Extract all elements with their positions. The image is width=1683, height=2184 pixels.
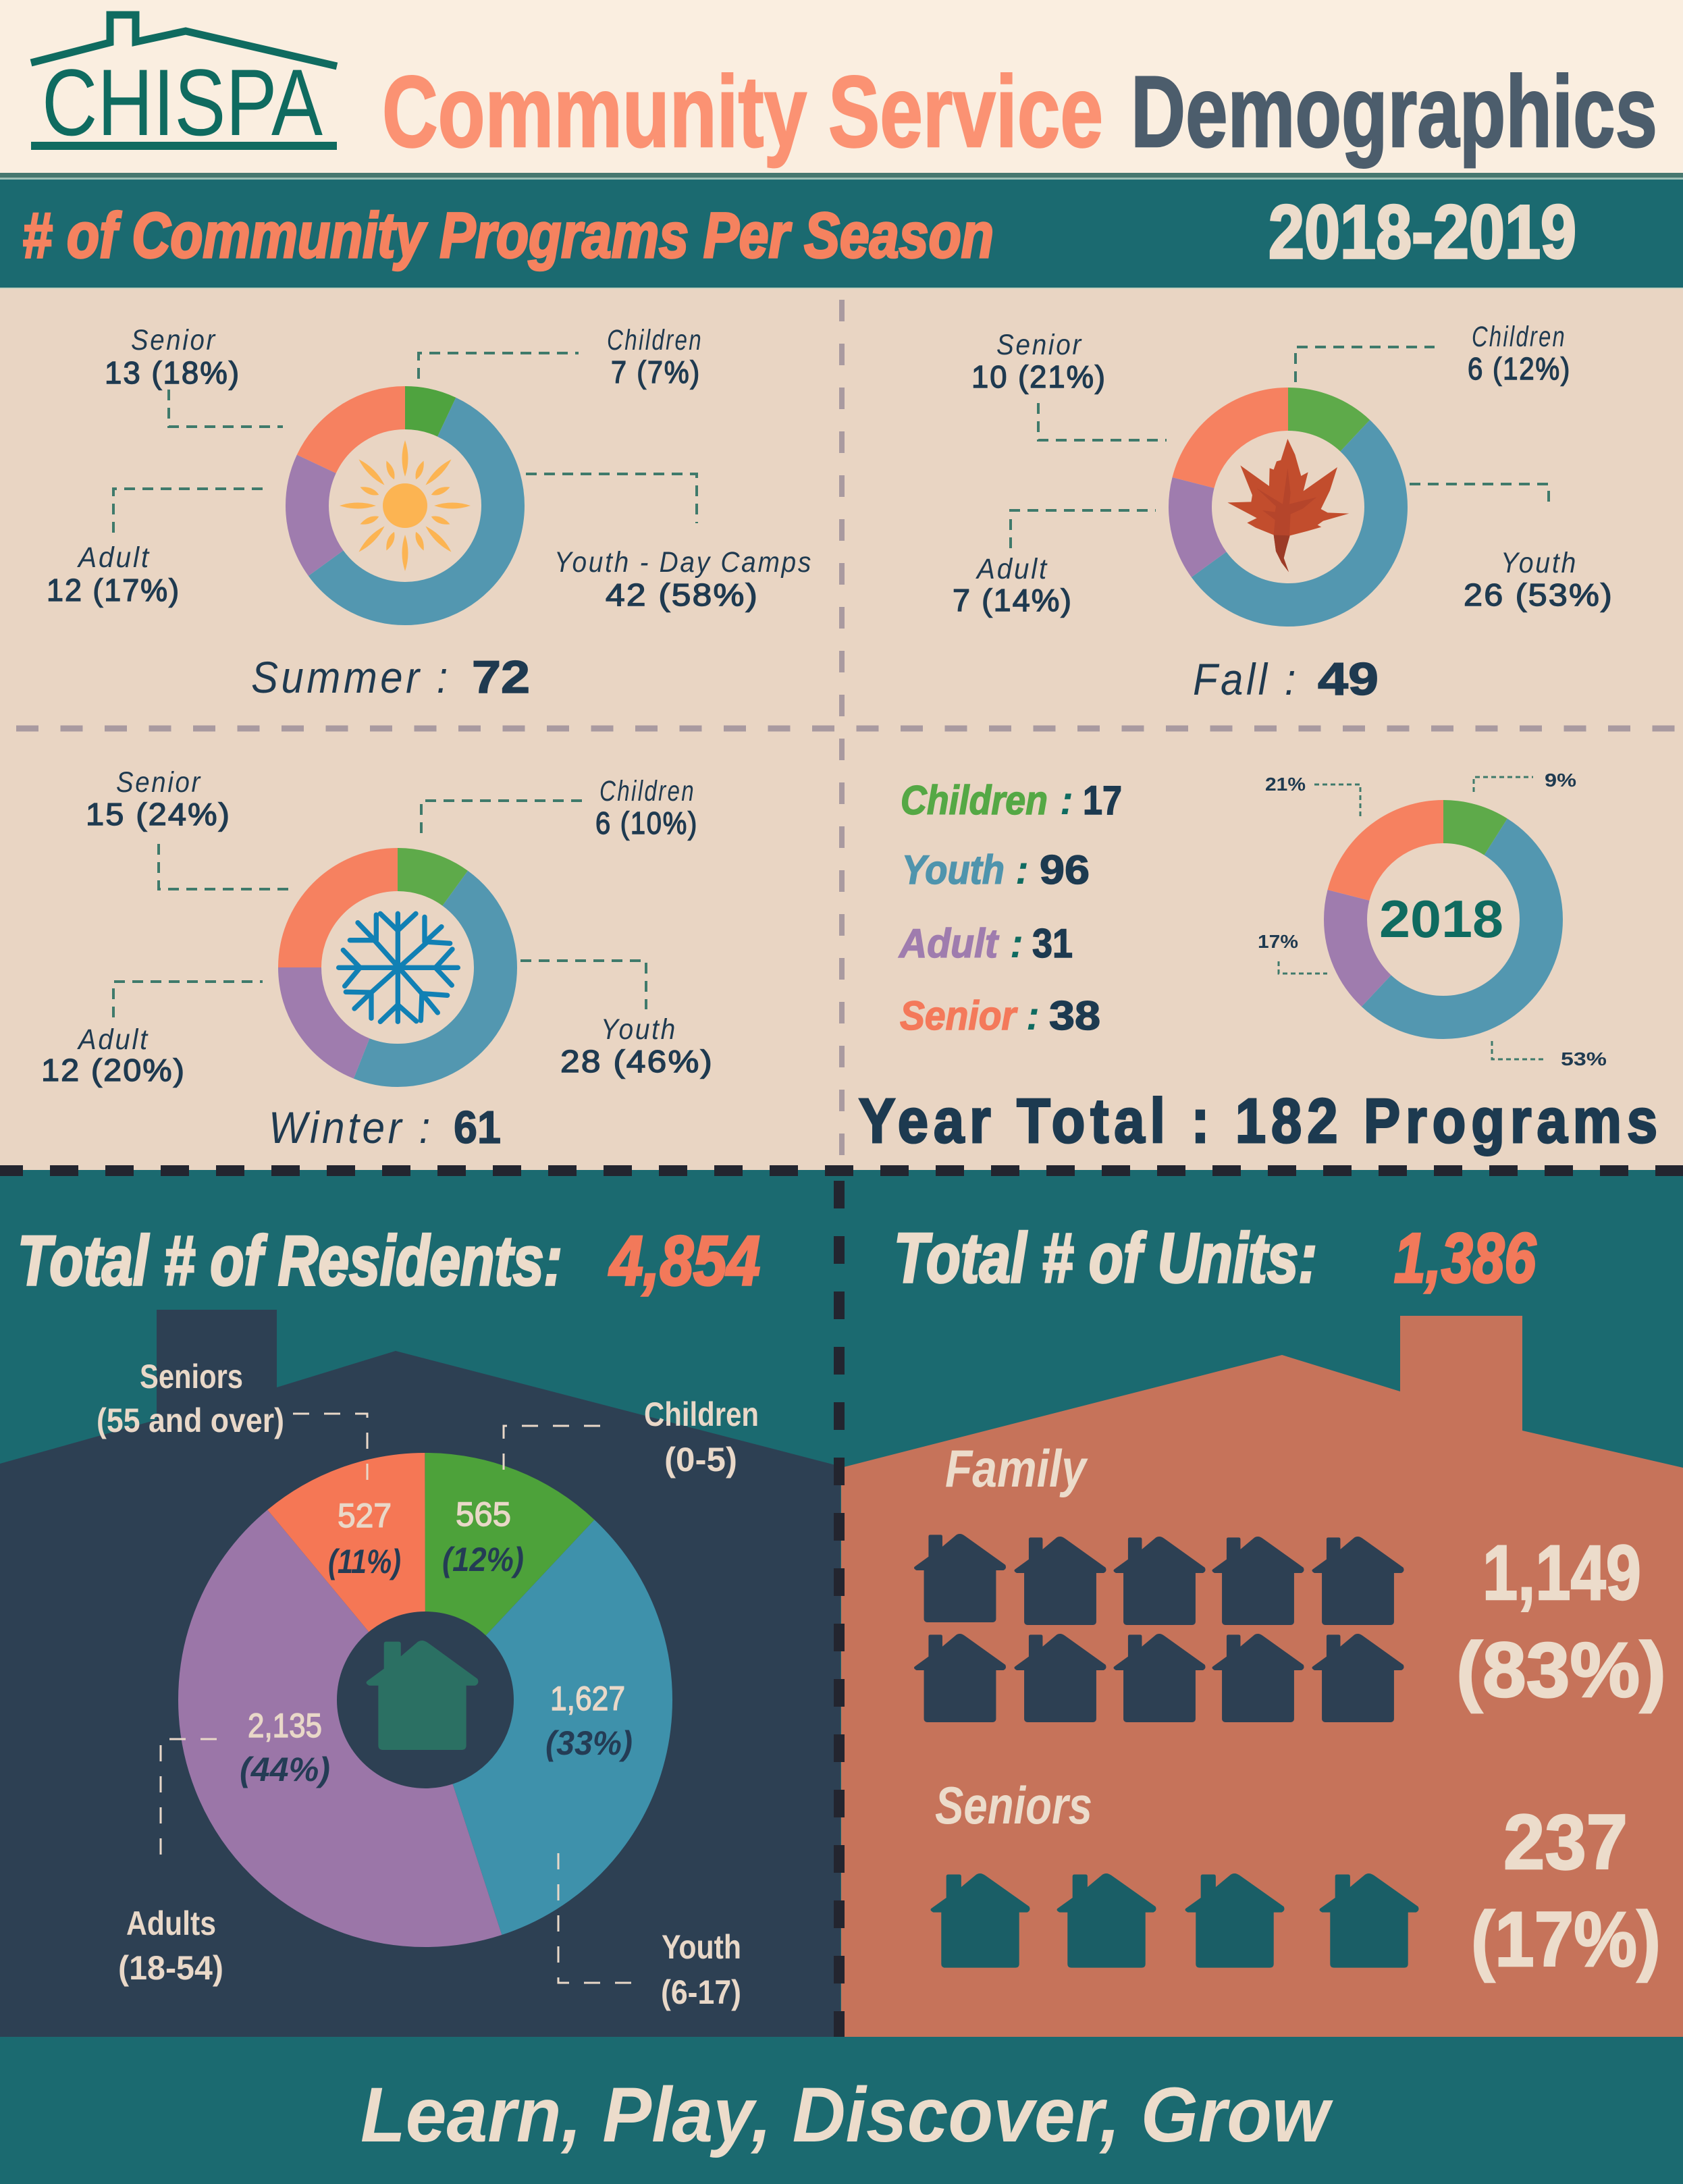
- seniors value: [1471, 1799, 1661, 1983]
- section banner: [0, 173, 1683, 289]
- logo: CHISPA: CHISPA: [42, 49, 323, 155]
- labels: fall: Senior: [996, 329, 1083, 361]
- labels: summer: [47, 324, 813, 612]
- labels: summer: 42 (58%): [606, 577, 759, 612]
- family label: Family: [945, 1439, 1088, 1498]
- labels: summer: Children: [607, 324, 703, 356]
- slice values: residents: (33%): [545, 1724, 633, 1762]
- labels: fall: 10 (21%): [971, 359, 1106, 394]
- year category list: Adult: [898, 921, 1000, 966]
- total: summer: 72: [472, 651, 530, 703]
- labels: fall: Youth: [1501, 547, 1578, 579]
- panel: residents: [18, 1222, 760, 2011]
- year category list: [898, 778, 1122, 1038]
- family value: [1456, 1530, 1666, 1713]
- year category list: 38: [1049, 993, 1100, 1038]
- residents heading: Total # of Residents:: [18, 1222, 562, 1300]
- seniors value: 237: [1503, 1799, 1628, 1886]
- year category list: :: [1015, 847, 1029, 893]
- pie chart: residents: [258, 1533, 593, 1867]
- labels: winter: 12 (20%): [41, 1053, 186, 1088]
- family value: (83%): [1456, 1627, 1666, 1713]
- leader lines: fall: [1011, 347, 1549, 548]
- seniors value: (17%): [1471, 1896, 1661, 1983]
- total: fall: 49: [1318, 654, 1379, 705]
- percentage labels: year: 17%: [1258, 931, 1298, 952]
- leader lines: summer: [113, 353, 697, 533]
- total: fall: Fall :: [1193, 654, 1299, 704]
- labels: summer: Youth - Day Camps: [554, 546, 813, 579]
- donut: summer: [307, 408, 503, 604]
- panel: units: [894, 1219, 1666, 1983]
- labels: winter: [41, 766, 714, 1088]
- lower background: [0, 1170, 1683, 2184]
- labels: fall: 6 (12%): [1468, 351, 1571, 386]
- donut: fall: [1190, 409, 1386, 605]
- labels: winter: Youth: [601, 1013, 677, 1046]
- footer band: Learn, Play, Discover, Grow: [360, 2072, 1333, 2158]
- year category list: 31: [1032, 921, 1073, 966]
- donut: 2018: [1345, 822, 1541, 1017]
- labels: fall: [953, 321, 1613, 618]
- panel: year total: [859, 770, 1663, 1156]
- icons: senior houses: [930, 1873, 1419, 1968]
- year category list: Youth: [902, 847, 1005, 893]
- residents heading: 4,854: [608, 1222, 760, 1300]
- category labels: residents: Youth: [662, 1928, 741, 1966]
- year category list: Senior: [900, 993, 1018, 1038]
- dashed dividers: [16, 300, 1683, 1165]
- leader lines: residents: [161, 1414, 633, 1983]
- slice values: residents: 2,135: [248, 1707, 322, 1744]
- category labels: residents: (18-54): [118, 1949, 223, 1987]
- category labels: residents: Children: [644, 1395, 759, 1433]
- year category list: :: [1010, 921, 1023, 966]
- header background: [0, 0, 1683, 173]
- year category list: Children: [901, 778, 1048, 823]
- category labels: residents: (55 and over): [97, 1402, 284, 1439]
- donut: winter: [300, 870, 496, 1065]
- black dashed dividers: [0, 1171, 1683, 2037]
- total: winter: Winter :: [269, 1102, 433, 1152]
- labels: winter: 15 (24%): [86, 797, 231, 832]
- residents house: [0, 1310, 840, 2037]
- labels: summer: 12 (17%): [47, 572, 180, 608]
- percentage labels: year: 9%: [1545, 770, 1576, 791]
- slice values: residents: (12%): [442, 1541, 524, 1578]
- section banner: 2018-2019: [1268, 190, 1576, 274]
- leader lines: year: [1279, 777, 1544, 1059]
- year category list: 17: [1083, 778, 1122, 823]
- footer band: [0, 2037, 1683, 2184]
- labels: winter: Children: [599, 775, 695, 807]
- icon: snowflake: [339, 913, 458, 1021]
- percentage labels: year: [1258, 770, 1607, 1069]
- slice values: residents: 1,627: [550, 1680, 625, 1717]
- labels: summer: 13 (18%): [105, 355, 240, 390]
- slice values: residents: 527: [338, 1497, 392, 1535]
- slice values: residents: (11%): [328, 1543, 401, 1580]
- slice values: residents: (44%): [240, 1751, 330, 1788]
- labels: winter: Senior: [116, 766, 202, 799]
- panel: winter: [41, 766, 714, 1153]
- logo: CHISPA: [31, 15, 337, 155]
- year category list: :: [1060, 778, 1073, 823]
- labels: fall: Children: [1472, 321, 1566, 353]
- units heading: 1,386: [1394, 1219, 1537, 1298]
- donut centre label: 2018: [1379, 889, 1503, 949]
- labels: fall: Adult: [975, 553, 1048, 585]
- slice values: residents: [240, 1495, 633, 1788]
- total: fall: [1193, 654, 1379, 705]
- section banner: # of Community Programs Per Season: [22, 200, 994, 271]
- icon: maple leaf: [1227, 439, 1349, 572]
- leader lines: winter: [113, 801, 646, 1017]
- labels: summer: Senior: [131, 324, 217, 356]
- labels: fall: 26 (53%): [1464, 577, 1613, 612]
- slice values: residents: 565: [456, 1495, 511, 1533]
- category labels: residents: Seniors: [140, 1358, 243, 1395]
- total: winter: 61: [454, 1102, 501, 1153]
- percentage labels: year: 21%: [1265, 774, 1306, 795]
- category labels: residents: [97, 1358, 759, 2011]
- category labels: residents: (6-17): [661, 1973, 741, 2011]
- units house: [841, 1316, 1683, 2037]
- seniors label: Seniors: [935, 1776, 1092, 1835]
- icons: family houses: [914, 1534, 1404, 1722]
- icon: centre house: [367, 1641, 478, 1750]
- year category list: :: [1026, 993, 1040, 1038]
- labels: winter: Adult: [76, 1023, 149, 1056]
- year category list: 96: [1040, 847, 1090, 893]
- labels: summer: 7 (7%): [611, 354, 701, 390]
- icon: sun: [340, 440, 471, 571]
- labels: summer: Adult: [76, 541, 151, 574]
- category labels: residents: Adults: [126, 1905, 216, 1942]
- title: Community Service: [382, 55, 1103, 168]
- percentage labels: year: 53%: [1561, 1048, 1607, 1069]
- units heading: Total # of Units:: [894, 1219, 1317, 1298]
- labels: fall: 7 (14%): [953, 583, 1073, 618]
- total: summer: Summer :: [251, 652, 451, 702]
- panel: fall: [953, 321, 1613, 705]
- labels: winter: 28 (46%): [560, 1044, 714, 1079]
- category labels: residents: (0-5): [664, 1441, 737, 1479]
- panel: summer: [47, 324, 813, 703]
- labels: winter: 6 (10%): [595, 805, 698, 841]
- family value: 1,149: [1482, 1530, 1641, 1616]
